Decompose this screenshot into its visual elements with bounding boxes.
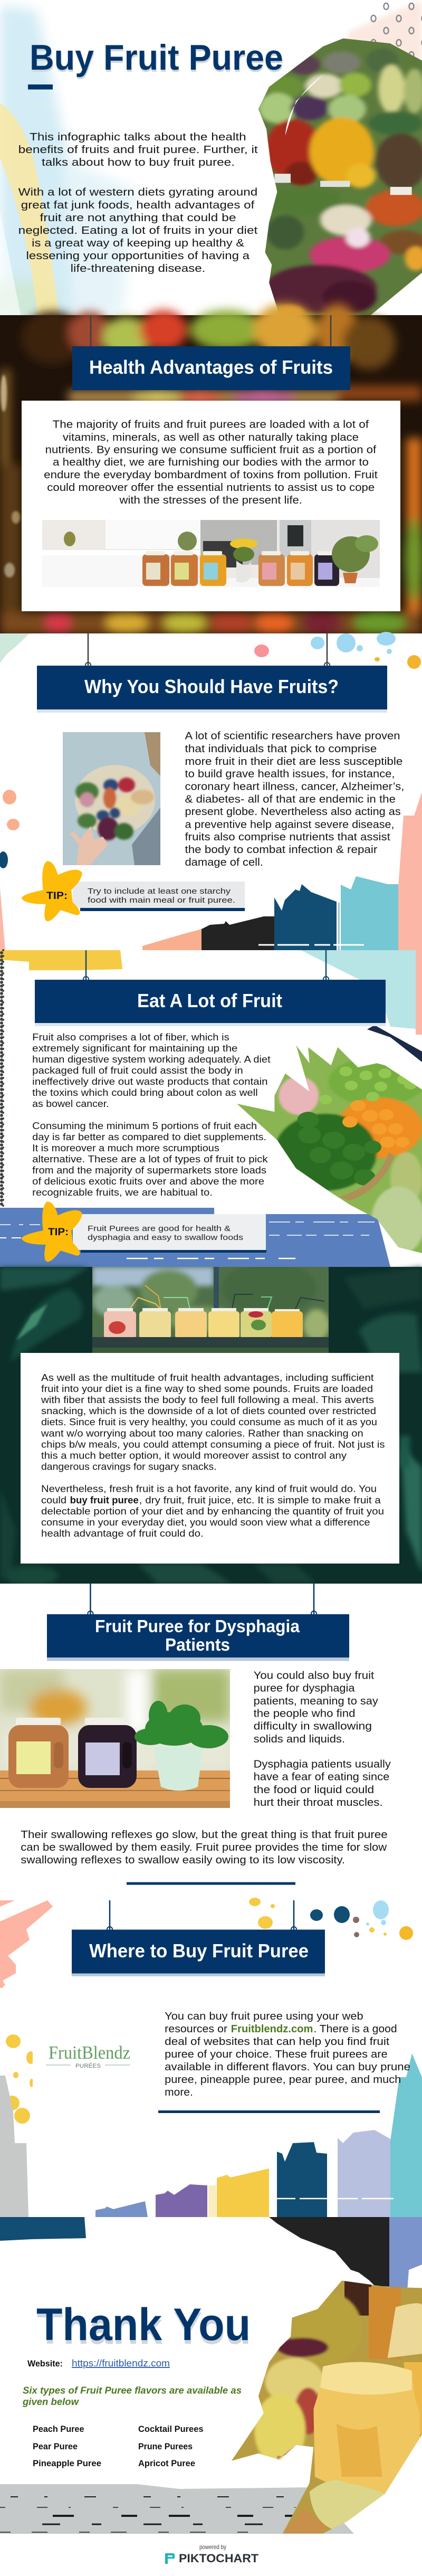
flavors list: Peach Puree (33, 2424, 84, 2434)
why-fruits text: that individuals that pick to comprise (185, 743, 377, 755)
eat fruit text: of delicious exotic fruits over and above the more (32, 1176, 264, 1187)
image: kitchen with puree jars (42, 520, 380, 587)
panel: weight loss text: snacking, which is the downside of a lot of diets counted over restricted (41, 1406, 376, 1416)
flavors subheading: Six types of Fruit Puree flavors are available as (23, 2385, 242, 2395)
dysphagia side text: the people who find (254, 1708, 356, 1720)
eat fruit text: Fruit also comprises a lot of fiber, which is (32, 1032, 229, 1043)
eat fruit text: the toxins which could bring about colon as well (32, 1087, 258, 1098)
why-fruits text: to build grave health issues, for instance, (185, 769, 395, 780)
website link (27, 2358, 170, 2369)
why-fruits text: A lot of scientific researchers have proven (185, 731, 400, 742)
title underline bar (28, 84, 53, 90)
section 5 background: dark leaves (0, 1267, 422, 1586)
tip callout 2: TIP: (48, 1227, 69, 1238)
flavors subheading (22, 2385, 242, 2407)
dysphagia side text: difficulty in swallowing (254, 1721, 372, 1732)
tip callout 1: TIP: (46, 891, 68, 902)
heading: why you should have fruits: Why You Should Have Fruits? (84, 676, 339, 697)
heading: health advantages: Health Advantages of Fruits (89, 356, 333, 378)
website link: Website: (27, 2359, 63, 2369)
panel: weight loss text (21, 1353, 399, 1564)
dysphagia side text: have a fear of eating since (254, 1772, 389, 1783)
intro text: great fat junk foods, health advantages of (21, 200, 255, 211)
intro text (18, 131, 258, 274)
where-to-buy text (165, 2011, 410, 2098)
title: Buy Fruit Puree (30, 37, 283, 78)
flavors list: Apricot Puree (138, 2458, 195, 2468)
image: puree jars and plant on table (0, 1669, 230, 1808)
eat fruit text: day is far better as compared to diet supplements. (32, 1132, 266, 1142)
tip callout 2: Fruit Purees are good for health & (88, 1224, 231, 1233)
eat fruit text: packaged full of fruit could assist the body in (32, 1065, 243, 1076)
divider bar (158, 2110, 380, 2113)
intro text: talks about how to buy fruit puree. (42, 157, 235, 168)
heading: where to buy: Where to Buy Fruit Puree (89, 1940, 309, 1962)
flavors list: Cocktail Purees (138, 2424, 204, 2434)
panel: weight loss text: As well as the multitude of fruit health advantages, including sufficient (41, 1372, 374, 1383)
panel: weight loss text: buy fruit puree (70, 1495, 139, 1505)
eat fruit text (32, 1032, 271, 1198)
panel: health advantages: The majority of fruits and fruit purees are loaded with a lot of (53, 419, 369, 431)
panel: health advantages: endure the everyday bombardment of toxins from pollution. Fruit (44, 469, 378, 481)
logo: FruitBlendz Purees (33, 2027, 138, 2085)
eat fruit text: human digestive system working adequately. A diet (32, 1054, 271, 1065)
panel: weight loss text: chips b/w meals, you could attempt consuming a piece of fruit. Not just is (41, 1439, 385, 1450)
why-fruits text: damage of cell. (185, 857, 263, 868)
where-to-buy text: Fruitblendz.com (231, 2023, 313, 2035)
heading: eat a lot of fruit (35, 950, 386, 1026)
panel: health advantages (22, 401, 400, 611)
dysphagia side text: hurt their throat muscles. (254, 1797, 383, 1808)
eat fruit text: It is moreover a much more scrumptious (32, 1143, 219, 1153)
why-fruits text: coronary heart illness, cancer, Alzheimer’s, (185, 781, 404, 793)
flavors list: Prune Purees (138, 2441, 193, 2451)
dysphagia side text: Dysphagia patients usually (254, 1759, 391, 1770)
dysphagia bottom text: can be swallowed by them easily. Fruit puree provides the time for slow (21, 1842, 387, 1853)
why-fruits text: & diabetes- all of that are endemic in the (185, 794, 396, 806)
where-to-buy text: You can buy fruit puree using your web (165, 2011, 363, 2022)
panel: health advantages: could moreover offer the essential nutrients to assist us to cope (47, 482, 375, 494)
image: vegetable market stall (258, 38, 422, 315)
section 1 background: intro (0, 0, 422, 322)
panel: health advantages: nutrients. By ensuring we consume sufficient fruit as a portion of (45, 444, 377, 456)
where-to-buy text: resources or (165, 2023, 227, 2035)
dysphagia side text: patients, meaning to say (254, 1696, 378, 1707)
where-to-buy text: more. (165, 2087, 193, 2098)
image: pear and apple puree jars (229, 2277, 422, 2536)
why-fruits text: the body to combat infection & repair (185, 844, 378, 856)
intro text: life-threatening disease. (71, 263, 205, 274)
panel: weight loss text: want w/o worrying about too many calories. Rather than snacking on (41, 1428, 363, 1439)
website link: https://fruitblendz.com (72, 2358, 170, 2369)
flavors list: Pineapple Puree (33, 2458, 101, 2468)
heading: health advantages (72, 315, 350, 390)
where-to-buy text: puree, pineapple puree, pear puree, and much (165, 2074, 401, 2086)
panel: health advantages: with the stresses of the present life. (119, 495, 302, 506)
dysphagia side text: puree for dysphagia (254, 1683, 355, 1694)
section 8 background brushes (0, 2217, 422, 2576)
heading: dysphagia: Patients (165, 1635, 230, 1654)
intro text: With a lot of western diets gyrating around (18, 187, 257, 198)
eat fruit text: recognizable fruits, we are habitual to. (32, 1187, 213, 1198)
tip callout 2: dysphagia and easy to swallow foods (88, 1233, 243, 1242)
heading: dysphagia: Fruit Puree for Dysphagia (95, 1616, 300, 1636)
panel: weight loss text: , dry fruit, fruit juice, etc. It is simple to make fruit a (139, 1495, 381, 1505)
where-to-buy text: deal of websites that can help you find fruit (165, 2036, 390, 2048)
thank you heading: Thank You (36, 2299, 251, 2350)
intro text: fruit are not anything that could be (40, 212, 236, 224)
divider bar (127, 1882, 295, 1885)
section 6 background (0, 1584, 422, 1900)
section 7 background brushes and splashes (0, 1898, 422, 2217)
section 2 background: market photo (0, 304, 422, 634)
eat fruit text: as bowel cancer. (32, 1098, 109, 1109)
heading: dysphagia (47, 1584, 349, 1661)
panel: weight loss text: could (41, 1495, 66, 1505)
image: infused water jars (92, 1262, 330, 1353)
dysphagia bottom text: Their swallowing reflexes go slow, but the great thing is that fruit puree (21, 1829, 388, 1841)
footer: powered by Piktochart: PIKTOCHART (179, 2552, 259, 2565)
footer: powered by Piktochart: powered by (199, 2543, 226, 2551)
image: fruit plate (63, 732, 160, 865)
intro text: lessening your opportunities of having a (26, 250, 250, 262)
dysphagia side text: the food or liquid could (254, 1784, 374, 1796)
panel: weight loss text: dangerous cravings for sugary snacks. (41, 1462, 217, 1472)
why-fruits text: fruits also comprise nutrients that assist (185, 831, 390, 843)
eat fruit text: ineffectively drive out waste products that contain (32, 1076, 268, 1087)
dysphagia bottom text (21, 1829, 388, 1866)
logo: FruitBlendz Purees: FruitBlendz (49, 2042, 130, 2063)
panel: weight loss text: with fiber that assists the body to feel full following a meal. This averts (41, 1395, 374, 1405)
panel: weight loss text: health advantage of fruit could do. (41, 1528, 204, 1539)
heading: where to buy (72, 1900, 325, 1976)
footer: powered by Piktochart (165, 2543, 259, 2565)
why-fruits text: present globe. Nevertheless also acting as (185, 806, 401, 818)
flavors list (33, 2424, 204, 2468)
panel: weight loss text: fruit into your diet is a fine way to shed some pounds. Fruits are loaded (41, 1384, 373, 1394)
tip callout 1: food with main meal or fruit puree. (88, 896, 235, 905)
heading: why you should have fruits (37, 633, 387, 713)
why-fruits text (185, 731, 404, 868)
tip callout 1 (22, 861, 245, 921)
image: apples, oranges and limes (237, 1045, 422, 1253)
eat fruit text: from and the majority of supermarkets store loads (32, 1165, 266, 1176)
panel: weight loss text: diets. Since fruit is very healthy, you could consume as much of it as you (41, 1417, 377, 1427)
dysphagia side text (254, 1670, 391, 1808)
section 3 background splashes (0, 632, 422, 950)
panel: weight loss text: this a much better option, it would moreover assist to control any (41, 1451, 347, 1461)
where-to-buy text: puree of your choice. These fruit purees are (165, 2049, 388, 2060)
intro text: is a great way of keeping up healthy & (32, 238, 245, 249)
panel: weight loss text: consume in your everyday diet, you would soon view what a difference (41, 1517, 370, 1528)
eat fruit text: alternative. These are a lot of types of fruit to pick (32, 1154, 268, 1164)
panel: health advantages: vitamins, minerals, as well as other naturally taking place (63, 432, 359, 443)
panel: health advantages: a healthy diet, we are furnishing our bodies with the armor to (53, 457, 369, 468)
flavors list: Pear Puree (33, 2441, 78, 2451)
brush strokes: section 3 bottom (142, 792, 422, 950)
intro text: benefits of fruits and fruit puree. Further, it (18, 144, 258, 156)
flavors subheading: given below (22, 2397, 79, 2407)
tip callout 2 (22, 1201, 266, 1262)
heading: eat a lot of fruit: Eat A Lot of Fruit (137, 990, 282, 1011)
where-to-buy text: available in different flavors. You can buy prune (165, 2061, 410, 2073)
intro text: This infographic talks about the health (30, 131, 246, 143)
why-fruits text: a preventive help against severe disease, (185, 819, 395, 831)
eat fruit text: extremely significant for maintaining up the (32, 1043, 237, 1054)
tip callout 1: Try to include at least one starchy (88, 887, 231, 896)
panel: weight loss text: Nevertheless, fresh fruit is a hot favorite, any kind of fruit would do. You (41, 1484, 377, 1494)
panel: weight loss text: delectable portion of your diet and by enhancing the quantity of fruit you (41, 1506, 384, 1517)
where-to-buy text: . There is a good (313, 2023, 397, 2035)
eat fruit text: Consuming the minimum 5 portions of fruit each (32, 1121, 257, 1131)
logo: FruitBlendz Purees: PURÉES (75, 2062, 101, 2069)
why-fruits text: more fruit in their diet are less susceptible (185, 756, 402, 768)
intro text: neglected. Eating a lot of fruits in your diet (18, 225, 258, 236)
dysphagia side text: You could also buy fruit (254, 1670, 375, 1682)
decorative ring pattern and peach wash (348, 0, 422, 174)
dysphagia bottom text: swallowing reflexes to swallow easily owing to its low viscosity. (21, 1854, 345, 1866)
section 4 background brushes (0, 950, 422, 1267)
dysphagia side text: solids and liquids. (254, 1734, 345, 1745)
